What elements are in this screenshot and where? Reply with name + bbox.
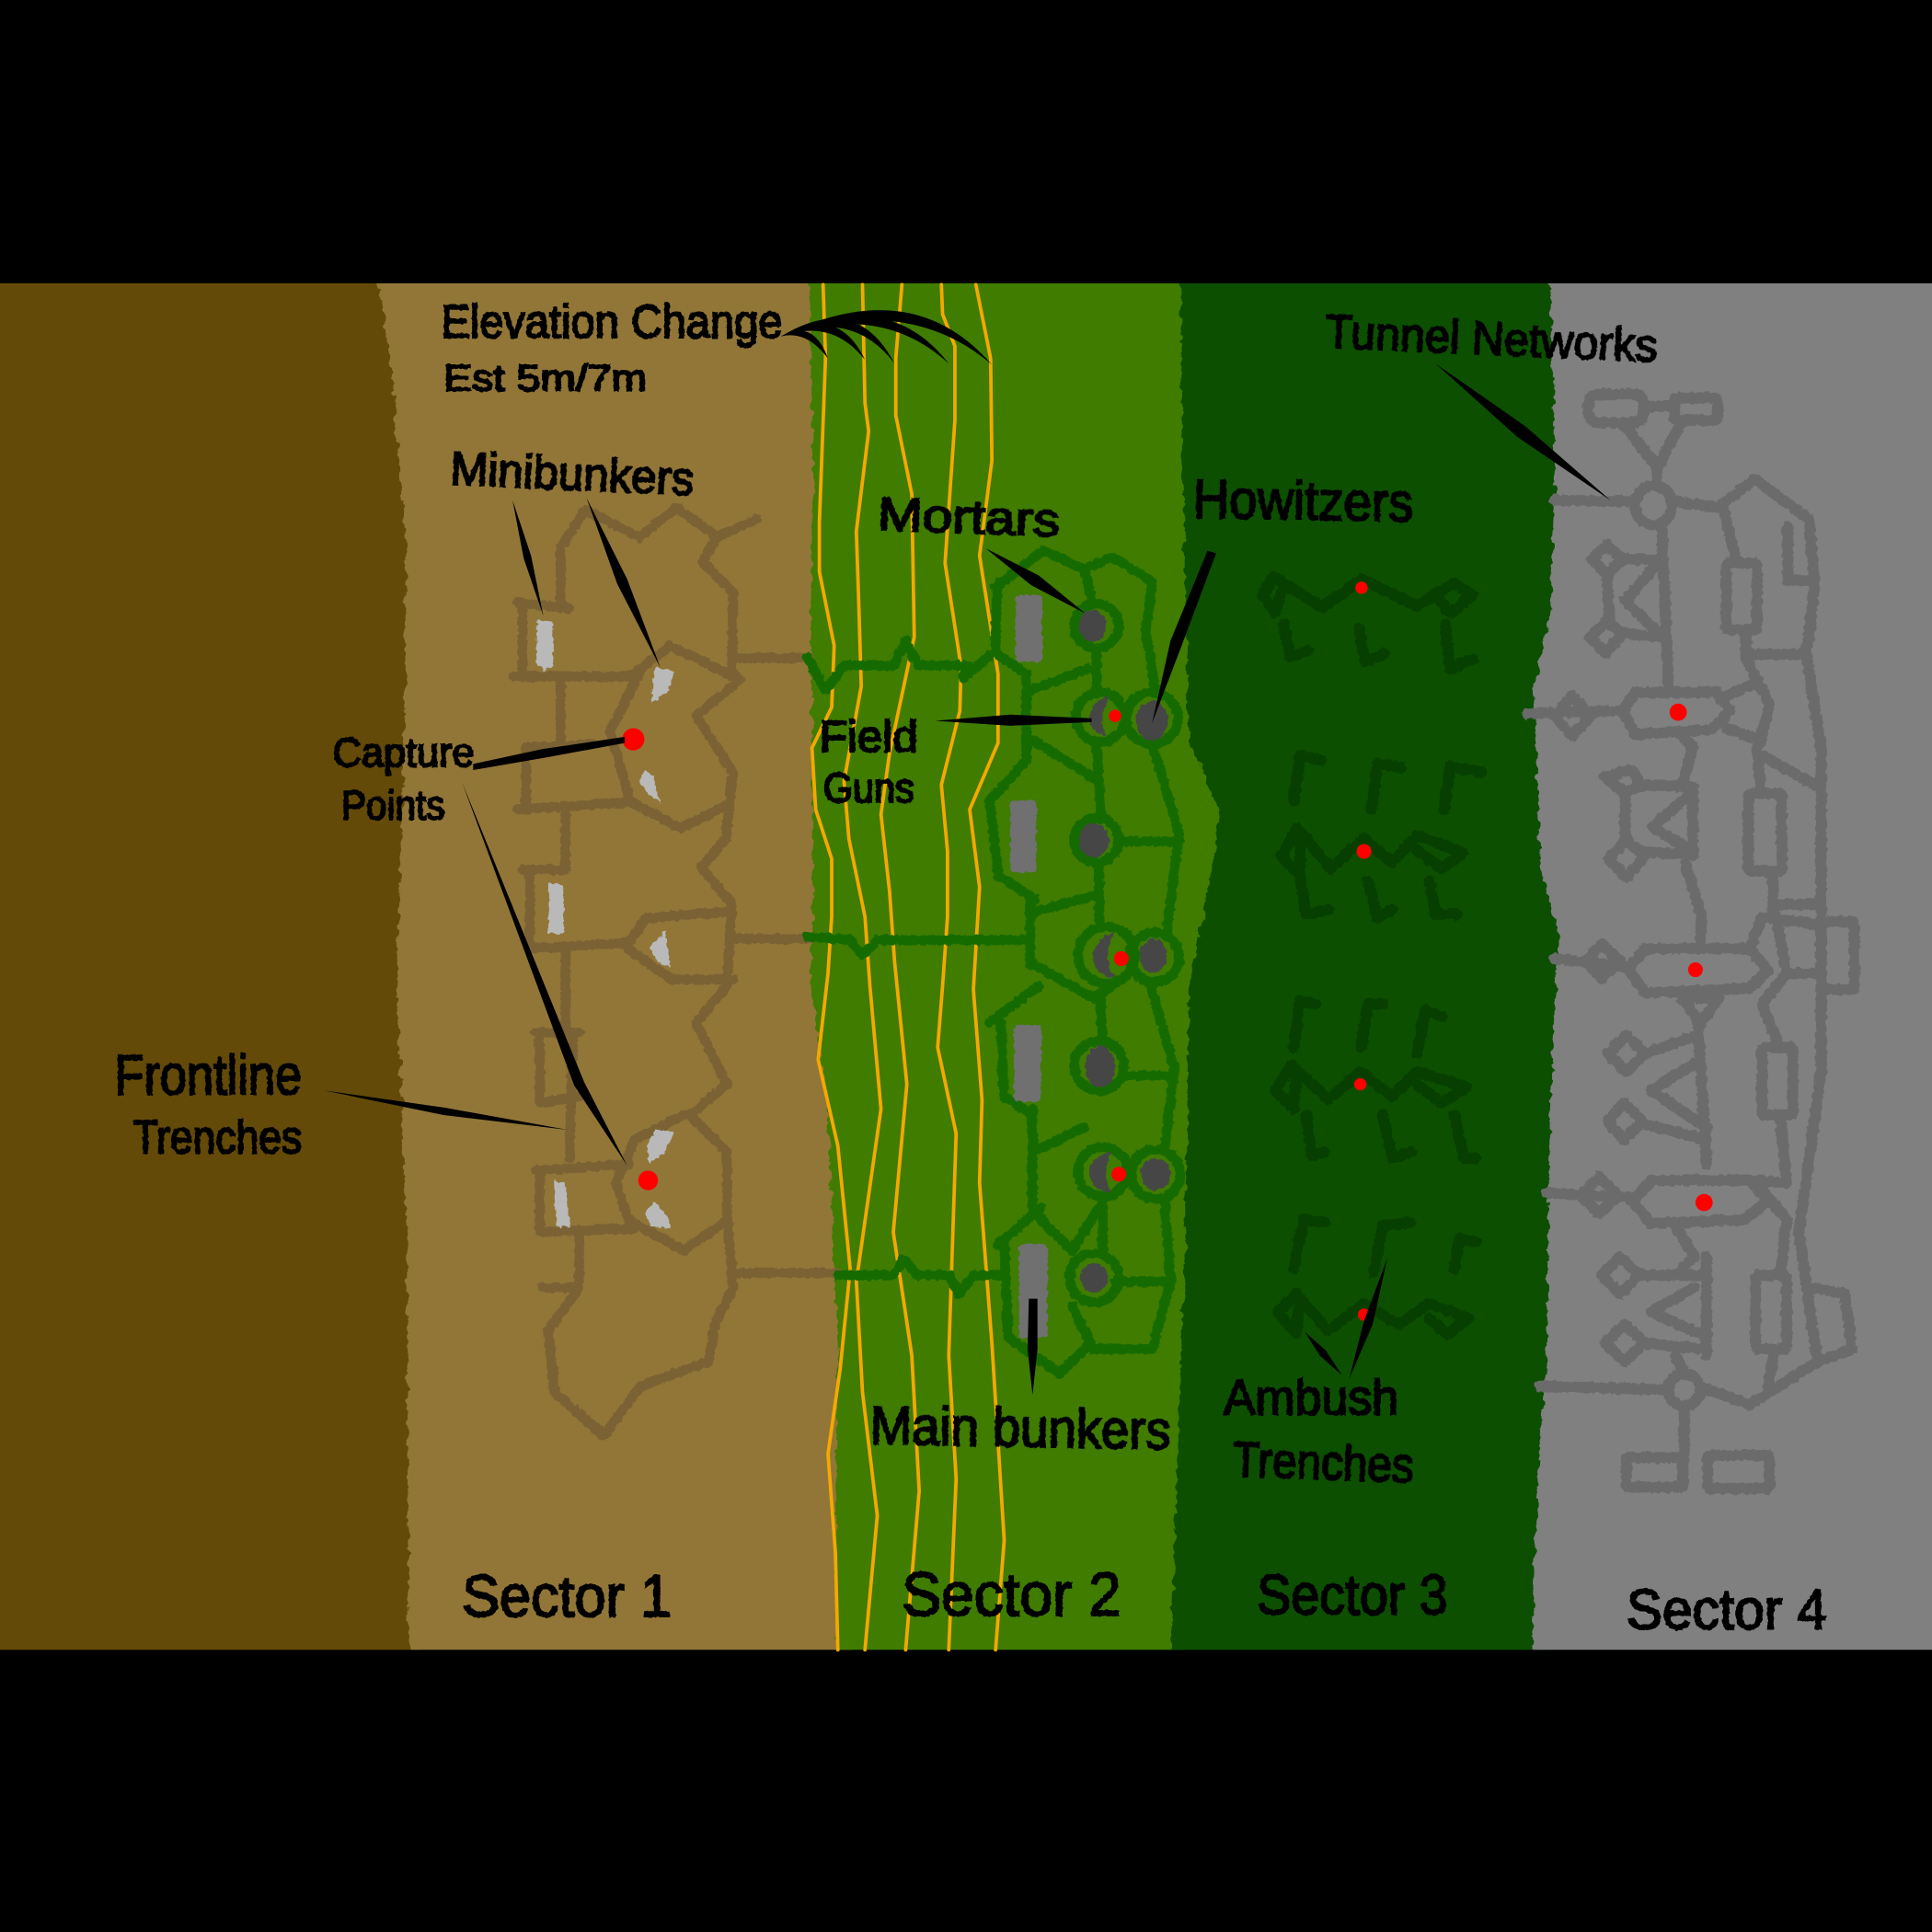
label: main bunkers: Main bunkers	[869, 1397, 1171, 1461]
arrow: howitzers	[1152, 551, 1216, 723]
arrows: elevation change pointers	[781, 310, 992, 364]
arrow: minibunker right	[587, 498, 661, 668]
arrow: minibunker left	[512, 500, 544, 616]
label: sector 2: Sector 2	[902, 1560, 1121, 1629]
arrow: tunnel networks	[1435, 363, 1610, 500]
capture point: sector 3 fourth	[1358, 1308, 1370, 1321]
chart: elevation contour lines	[812, 284, 1005, 1650]
label: sector 3: Sector 3	[1257, 1563, 1448, 1627]
panel: main bunkers	[1010, 595, 1047, 1338]
panel: mortars and howitzers	[1079, 610, 1170, 1293]
panel: sector 3 ambush trenches	[1263, 577, 1481, 1334]
capture point: sector 4 third	[1696, 1194, 1713, 1212]
capture point: sector 1 lower	[638, 1170, 658, 1190]
panel: sector 2 trench network	[807, 551, 1180, 1374]
label: minibunkers: Minibunkers	[449, 442, 696, 505]
terrain: sector 1 tan	[375, 271, 850, 1663]
cluster 2	[1282, 755, 1481, 918]
bunker 3	[1014, 1025, 1041, 1101]
capture point: sector 3 first	[1355, 581, 1368, 594]
panel: map background	[0, 271, 1932, 1663]
capture point: sector 2 upper	[1109, 709, 1121, 722]
arrow: main bunkers	[1028, 1299, 1038, 1395]
label: capture: Capture	[333, 730, 475, 776]
terrain: sector 2 green	[810, 271, 1232, 1663]
label: guns: Guns	[823, 765, 914, 811]
label: field: Field	[820, 712, 918, 762]
panel: sector 4 tunnel network	[1528, 395, 1855, 1489]
arrow: field guns	[936, 715, 1092, 726]
bunker 4	[1019, 1245, 1047, 1338]
bunker 2	[1010, 801, 1036, 872]
arrow: frontline trenches	[324, 1090, 568, 1130]
panel: sector 1 minibunkers	[536, 620, 674, 1228]
panel: capture points	[622, 581, 1713, 1321]
label: mortars: Mortars	[877, 488, 1061, 546]
panel: sector 1 frontline trenches	[513, 508, 838, 1435]
capture point: sector 2 middle	[1114, 951, 1129, 966]
arrow: capture point lower	[462, 782, 627, 1166]
terrain: outer brown ground	[0, 271, 419, 1663]
label: ambush: Ambush	[1224, 1371, 1398, 1425]
terrain: sector 3 dark green	[1170, 271, 1565, 1663]
heading: elevation change: Elevation Change	[441, 295, 782, 348]
terrain: sector 4 grey	[1532, 271, 1932, 1663]
cluster 1	[1263, 577, 1472, 669]
label: sector 1: Sector 1	[462, 1563, 672, 1629]
label: tunnel networks: Tunnel Networks	[1324, 305, 1659, 372]
label: howitzers: Howitzers	[1192, 470, 1414, 534]
label: ambush trenches: Trenches	[1232, 1432, 1415, 1493]
capture point: sector 2 lower	[1111, 1167, 1126, 1181]
bunker 1	[1016, 595, 1042, 661]
label: sector 4: Sector 4	[1627, 1579, 1827, 1642]
cluster 4	[1278, 1220, 1476, 1334]
arrow: capture point upper	[473, 737, 625, 770]
cluster 3	[1275, 1001, 1476, 1158]
capture point: sector 4 second	[1688, 962, 1703, 977]
text: elevation estimate: Est 5m/7m	[443, 358, 647, 399]
label: frontline trenches: Trenches	[133, 1111, 302, 1164]
arrow: ambush trenches right	[1350, 1258, 1387, 1379]
arrows: label leader lines	[324, 363, 1610, 1395]
label: points: Points	[341, 784, 444, 829]
arrow: mortars	[985, 548, 1086, 614]
capture point: sector 1 upper	[622, 729, 644, 751]
label: frontline: Frontline	[115, 1043, 302, 1107]
capture point: sector 3 third	[1354, 1078, 1366, 1090]
capture point: sector 3 second	[1357, 844, 1372, 858]
arrow: ambush trenches left	[1305, 1332, 1341, 1375]
capture point: sector 4 first	[1670, 704, 1686, 720]
